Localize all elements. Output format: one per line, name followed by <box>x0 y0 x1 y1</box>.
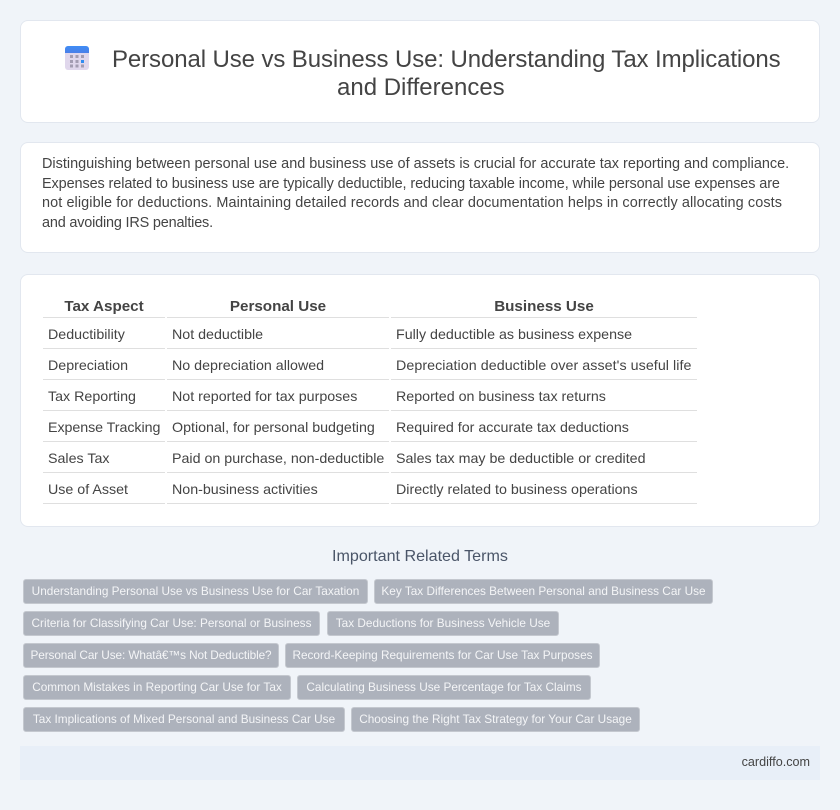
comparison table: Tax Aspect <box>64 298 144 315</box>
related terms tags: Understanding Personal Use vs Business Use for Car Taxation <box>32 584 359 598</box>
comparison table: Expense Tracking <box>48 420 160 436</box>
comparison table: Use of Asset <box>48 482 128 498</box>
text block: introduction: and avoiding IRS penalties. <box>42 215 213 231</box>
title: and Differences <box>337 74 505 101</box>
comparison table: Sales Tax <box>48 451 110 467</box>
related terms tags: Common Mistakes in Reporting Car Use for Tax <box>32 680 282 694</box>
icon: calendar <box>65 46 89 70</box>
heading: related terms: Important Related Terms <box>332 547 508 565</box>
comparison table: Sales tax may be deductible or credited <box>396 451 646 467</box>
comparison table: Tax Reporting <box>48 389 136 405</box>
related terms tags <box>23 579 713 732</box>
related terms tags: Key Tax Differences Between Personal and Business Car Use <box>381 584 706 598</box>
comparison table: Reported on business tax returns <box>396 389 606 405</box>
related terms tags: Choosing the Right Tax Strategy for Your Car Usage <box>359 712 632 726</box>
comparison table: Optional, for personal budgeting <box>172 420 375 436</box>
panel: introduction <box>20 142 820 253</box>
text block: introduction <box>42 156 789 231</box>
panel: comparison table <box>20 274 820 527</box>
footer <box>20 746 820 780</box>
related terms tags: Calculating Business Use Percentage for Tax Claims <box>306 680 582 694</box>
comparison table <box>43 298 697 504</box>
comparison table: Paid on purchase, non-deductible <box>172 451 384 467</box>
panel: title header <box>20 20 820 123</box>
comparison table: Deductibility <box>48 327 125 343</box>
comparison table: Directly related to business operations <box>396 482 638 498</box>
comparison table: Business Use <box>494 298 594 315</box>
comparison table: Depreciation <box>48 358 128 374</box>
comparison table: Required for accurate tax deductions <box>396 420 629 436</box>
text block: introduction: not eligible for deductions. Maintaining detailed records and clear documentation helps in correctly allocating costs <box>42 195 782 211</box>
related terms tags: Tax Implications of Mixed Personal and Business Car Use <box>33 712 335 726</box>
related terms tags: Criteria for Classifying Car Use: Personal or Business <box>32 616 311 630</box>
comparison table: Not deductible <box>172 327 263 343</box>
related terms tags: Personal Car Use: Whatâ€™s Not Deductible? <box>30 648 272 662</box>
comparison table: No depreciation allowed <box>172 358 324 374</box>
text block: introduction: Distinguishing between personal use and business use of assets is crucial for accurate tax reporting and compliance. <box>42 156 789 172</box>
title <box>112 46 781 101</box>
comparison table: Not reported for tax purposes <box>172 389 357 405</box>
title: Personal Use vs Business Use: Understanding Tax Implications <box>112 46 781 73</box>
comparison table: Personal Use <box>230 298 326 315</box>
comparison table: Fully deductible as business expense <box>396 327 632 343</box>
footer source: cardiffo.com <box>742 755 810 769</box>
text block: introduction: Expenses related to business use are typically deductible, reducing taxable income, while personal use expenses are <box>42 176 780 192</box>
related terms tags: Tax Deductions for Business Vehicle Use <box>336 616 550 630</box>
comparison table: Depreciation deductible over asset's useful life <box>396 358 692 374</box>
related terms tags: Record-Keeping Requirements for Car Use Tax Purposes <box>292 648 593 662</box>
comparison table: Non-business activities <box>172 482 318 498</box>
